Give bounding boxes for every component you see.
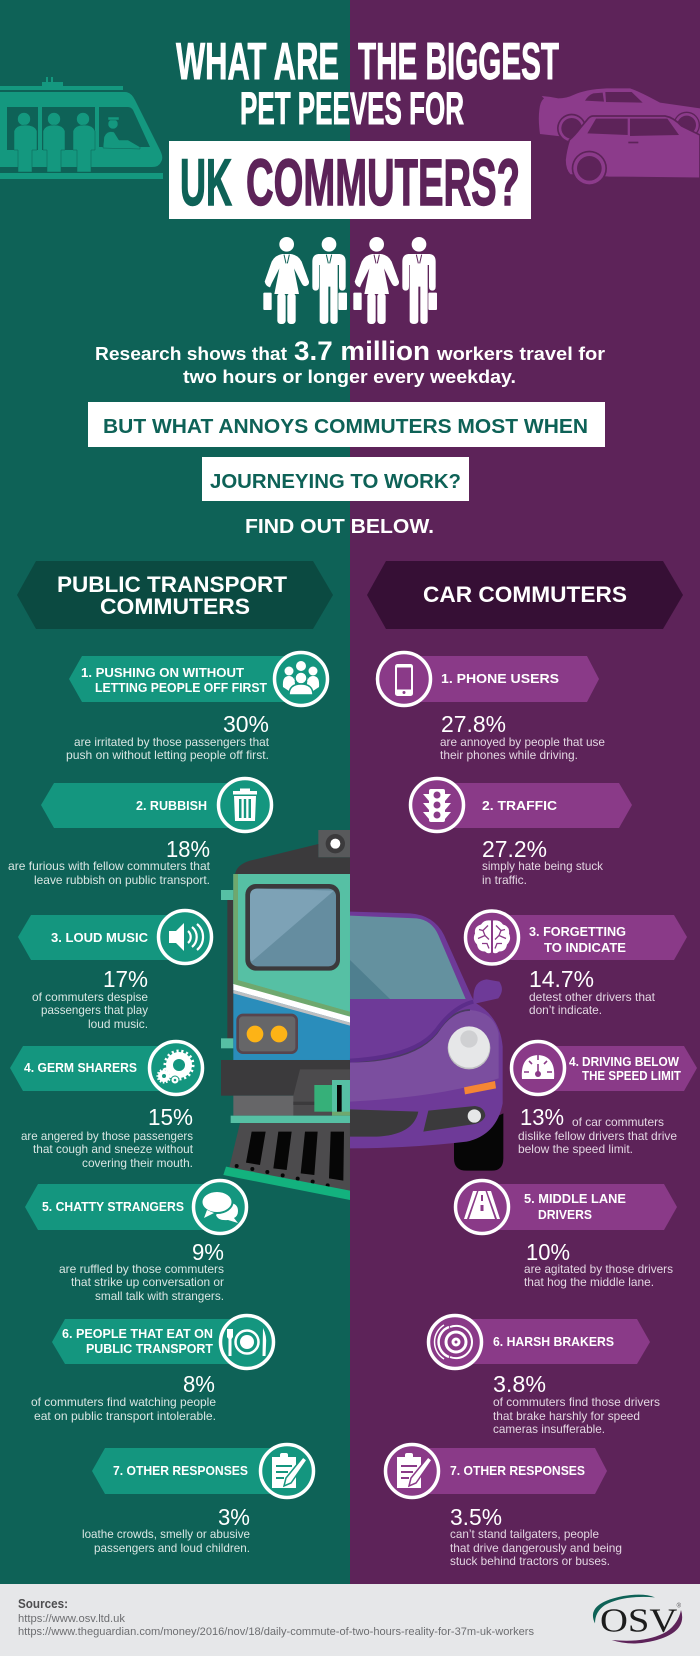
item: car 2 traffic xyxy=(410,778,632,887)
item: car 4 driving below speed limit: below the speed limit. xyxy=(518,1142,633,1156)
item: car 5 middle lane drivers: 10% xyxy=(526,1239,570,1265)
item: public 4 germ sharers: are angered by those passengers xyxy=(21,1129,193,1143)
footer: sources: Sources: xyxy=(18,1596,68,1611)
item: public 4 germ sharers: that cough and sneeze without xyxy=(33,1142,194,1156)
item: public 3 loud music xyxy=(18,910,212,1031)
item: car 5 middle lane drivers xyxy=(456,1180,677,1289)
item: public 3 loud music: loud music. xyxy=(88,1017,148,1031)
item: car 3 forgetting to indicate: TO INDICATE xyxy=(544,940,626,955)
item: public 7 other responses: 7. OTHER RESPONSES xyxy=(113,1463,248,1478)
item: public 4 germ sharers: 15% xyxy=(148,1104,193,1130)
icon: clipboard xyxy=(386,1444,438,1498)
item: public 1 pushing on: 30% xyxy=(223,711,269,737)
icon: phone xyxy=(378,652,430,706)
item: car 2 traffic: 2. TRAFFIC xyxy=(482,798,558,813)
item: car 4 driving below speed limit: of car commuters xyxy=(572,1115,664,1129)
item: public 5 chatty strangers: 5. CHATTY STRANGERS xyxy=(42,1199,184,1214)
item: public 1 pushing on xyxy=(66,652,328,762)
question box line 1: BUT WHAT ANNOYS COMMUTERS MOST WHEN xyxy=(103,416,588,438)
item: public 3 loud music: 17% xyxy=(103,966,148,992)
question box line 2: JOURNEYING TO WORK? xyxy=(210,471,461,493)
item: public 1 pushing on: 1. PUSHING ON WITHOUT xyxy=(81,665,244,680)
panel heading: public transport commuters: PUBLIC TRANSPORT xyxy=(57,572,288,597)
panel heading: car commuters xyxy=(367,561,683,629)
item: car 3 forgetting to indicate: 3. FORGETTING xyxy=(529,924,626,939)
item: public 6 eat on transport: eat on public transport intolerable. xyxy=(34,1409,216,1423)
item: car 6 harsh brakers: 6. HARSH BRAKERS xyxy=(493,1334,614,1349)
footer: sources xyxy=(0,1584,700,1656)
icon: speaker xyxy=(158,910,212,964)
illustration: car front xyxy=(350,912,503,1171)
item: public 4 germ sharers: covering their mouth. xyxy=(82,1156,193,1170)
item: car 6 harsh brakers: 3.8% xyxy=(493,1371,546,1397)
item: public 5 chatty strangers: are ruffled by those commuters xyxy=(59,1262,224,1276)
icon: germs xyxy=(150,1042,202,1094)
item: car 4 driving below speed limit: 4. xyxy=(569,1054,579,1069)
logo: OSV: ® xyxy=(677,1602,682,1609)
title box: UK commuters: UK xyxy=(180,145,232,219)
icon: speech bubbles xyxy=(194,1180,246,1234)
icon: traffic light xyxy=(410,778,464,832)
item: public 7 other responses: loathe crowds, smelly or abusive xyxy=(82,1527,250,1541)
icon: brain xyxy=(466,911,518,964)
icon: clipboard xyxy=(260,1444,314,1498)
item: car 5 middle lane drivers: are agitated by those drivers xyxy=(524,1262,673,1276)
intro text xyxy=(95,336,605,387)
item: car 5 middle lane drivers: that hog the middle lane. xyxy=(524,1275,654,1289)
item: public 2 rubbish xyxy=(8,778,272,887)
item: public 7 other responses xyxy=(82,1444,314,1555)
item: public 2 rubbish: leave rubbish on public transport. xyxy=(34,873,210,887)
item: car 4 driving below speed limit: THE SPEED LIMIT xyxy=(582,1068,681,1083)
item: car 3 forgetting to indicate: detest other drivers that xyxy=(529,990,656,1004)
item: car 3 forgetting to indicate: 14.7% xyxy=(529,966,594,992)
item: public 6 eat on transport xyxy=(31,1316,274,1423)
item: car 1 phone users xyxy=(378,652,605,762)
item: car 1 phone users: 27.8% xyxy=(441,711,506,737)
item: public 2 rubbish: 18% xyxy=(166,836,210,862)
background: public transport side xyxy=(0,0,350,1584)
icon: plate and cutlery xyxy=(220,1316,274,1368)
icon: road xyxy=(456,1180,508,1234)
footer: sources: https://www.osv.ltd.uk xyxy=(18,1613,126,1625)
icon: tram xyxy=(0,77,163,179)
front car xyxy=(565,116,700,186)
icon: crowd xyxy=(274,652,328,706)
icon: four commuters with briefcases xyxy=(263,237,437,324)
intro text: Research shows that xyxy=(95,343,287,364)
item: car 2 traffic: simply hate being stuck xyxy=(482,859,603,873)
item: car 7 other responses: 7. OTHER RESPONSES xyxy=(450,1463,585,1478)
item: public 3 loud music: 3. LOUD MUSIC xyxy=(51,930,149,945)
item: public 6 eat on transport: 8% xyxy=(183,1371,215,1397)
item: car 7 other responses: stuck behind tractors or buses. xyxy=(450,1554,610,1568)
find out below: FIND OUT BELOW. xyxy=(245,515,434,538)
item: car 6 harsh brakers: that brake harshly for speed xyxy=(493,1409,640,1423)
panel heading: public transport commuters: COMMUTERS xyxy=(100,594,250,619)
intro text: 3.7 million xyxy=(294,336,430,366)
item: public 1 pushing on: are irritated by those passengers that xyxy=(74,735,270,749)
item: car 5 middle lane drivers: 5. MIDDLE LANE xyxy=(524,1191,626,1206)
title xyxy=(176,33,559,134)
item: car 4 driving below speed limit: 13% xyxy=(520,1104,564,1130)
item: public 6 eat on transport: 6. PEOPLE THAT EAT ON xyxy=(62,1326,213,1341)
panel heading: public transport commuters xyxy=(17,561,333,629)
item: public 1 pushing on: push on without letting people off first. xyxy=(66,748,269,762)
item: car 3 forgetting to indicate: don’t indicate. xyxy=(529,1003,602,1017)
banner xyxy=(69,656,301,702)
item: car 4 driving below speed limit: dislike fellow drivers that drive xyxy=(518,1129,677,1143)
background: car side xyxy=(350,0,700,1584)
item: public 5 chatty strangers xyxy=(25,1180,246,1303)
item: car 7 other responses xyxy=(386,1444,622,1568)
item: car 4 driving below speed limit: DRIVING BELOW xyxy=(582,1054,680,1069)
title: THE BIGGEST xyxy=(358,33,559,91)
item: car 4 driving below speed limit xyxy=(512,1042,697,1156)
item: public 5 chatty strangers: that strike up conversation or xyxy=(71,1275,224,1289)
item: public 6 eat on transport: PUBLIC TRANSPORT xyxy=(86,1341,213,1356)
title: WHAT ARE xyxy=(176,33,339,91)
intro text: two hours or longer every weekday. xyxy=(183,366,516,387)
item: public 6 eat on transport: of commuters find watching people xyxy=(31,1395,216,1409)
icon: bin xyxy=(218,778,272,832)
item: car 1 phone users: their phones while driving. xyxy=(440,748,578,762)
item: public 1 pushing on: LETTING PEOPLE OFF FIRST xyxy=(95,680,267,695)
item: public 2 rubbish: are furious with fellow commuters that xyxy=(8,859,211,873)
item: car 2 traffic: 27.2% xyxy=(482,836,547,862)
icon: speedometer xyxy=(512,1042,564,1094)
item: car 6 harsh brakers: of commuters find those drivers xyxy=(493,1395,660,1409)
panel heading: car commuters: CAR COMMUTERS xyxy=(423,582,627,607)
footer: sources: https://www.theguardian.com/money/2016/nov/18/daily-commute-of-two-hours-reality-for-37m-uk-workers xyxy=(18,1626,535,1638)
item: car 2 traffic: in traffic. xyxy=(482,873,527,887)
icon: brake disc xyxy=(428,1316,482,1368)
item: car 7 other responses: can’t stand tailgaters, people xyxy=(450,1527,599,1541)
item: public 5 chatty strangers: 9% xyxy=(192,1239,224,1265)
item: public 7 other responses: passengers and loud children. xyxy=(94,1541,250,1555)
item: car 1 phone users: are annoyed by people that use xyxy=(440,735,605,749)
item: car 7 other responses: that drive dangerously and being xyxy=(450,1541,622,1555)
logo: OSV xyxy=(593,1595,682,1643)
item: car 5 middle lane drivers: DRIVERS xyxy=(538,1207,592,1222)
title: PET PEEVES FOR xyxy=(240,83,464,134)
back car xyxy=(539,88,700,143)
item: public 5 chatty strangers: small talk with strangers. xyxy=(95,1289,224,1303)
item: public 4 germ sharers xyxy=(10,1042,202,1170)
item: car 1 phone users: 1. PHONE USERS xyxy=(441,671,559,686)
item: car 3 forgetting to indicate xyxy=(466,911,687,1017)
item: public 4 germ sharers: 4. GERM SHARERS xyxy=(24,1060,137,1075)
question box line 1 xyxy=(88,402,605,447)
item: car 7 other responses: 3.5% xyxy=(450,1504,502,1530)
illustration: train front xyxy=(221,830,350,1200)
item: car 6 harsh brakers: cameras insufferable. xyxy=(493,1422,605,1436)
title box: UK commuters xyxy=(169,141,531,219)
intro text: workers travel for xyxy=(436,343,605,364)
item: public 2 rubbish: 2. RUBBISH xyxy=(136,798,207,813)
question box line 2 xyxy=(202,457,469,501)
logo: OSV: OSV xyxy=(600,1603,677,1640)
icon: cars xyxy=(539,88,700,186)
item: public 3 loud music: of commuters despise xyxy=(32,990,148,1004)
item: public 7 other responses: 3% xyxy=(218,1504,250,1530)
item: public 3 loud music: passengers that play xyxy=(41,1003,148,1017)
item: car 6 harsh brakers xyxy=(428,1316,660,1436)
